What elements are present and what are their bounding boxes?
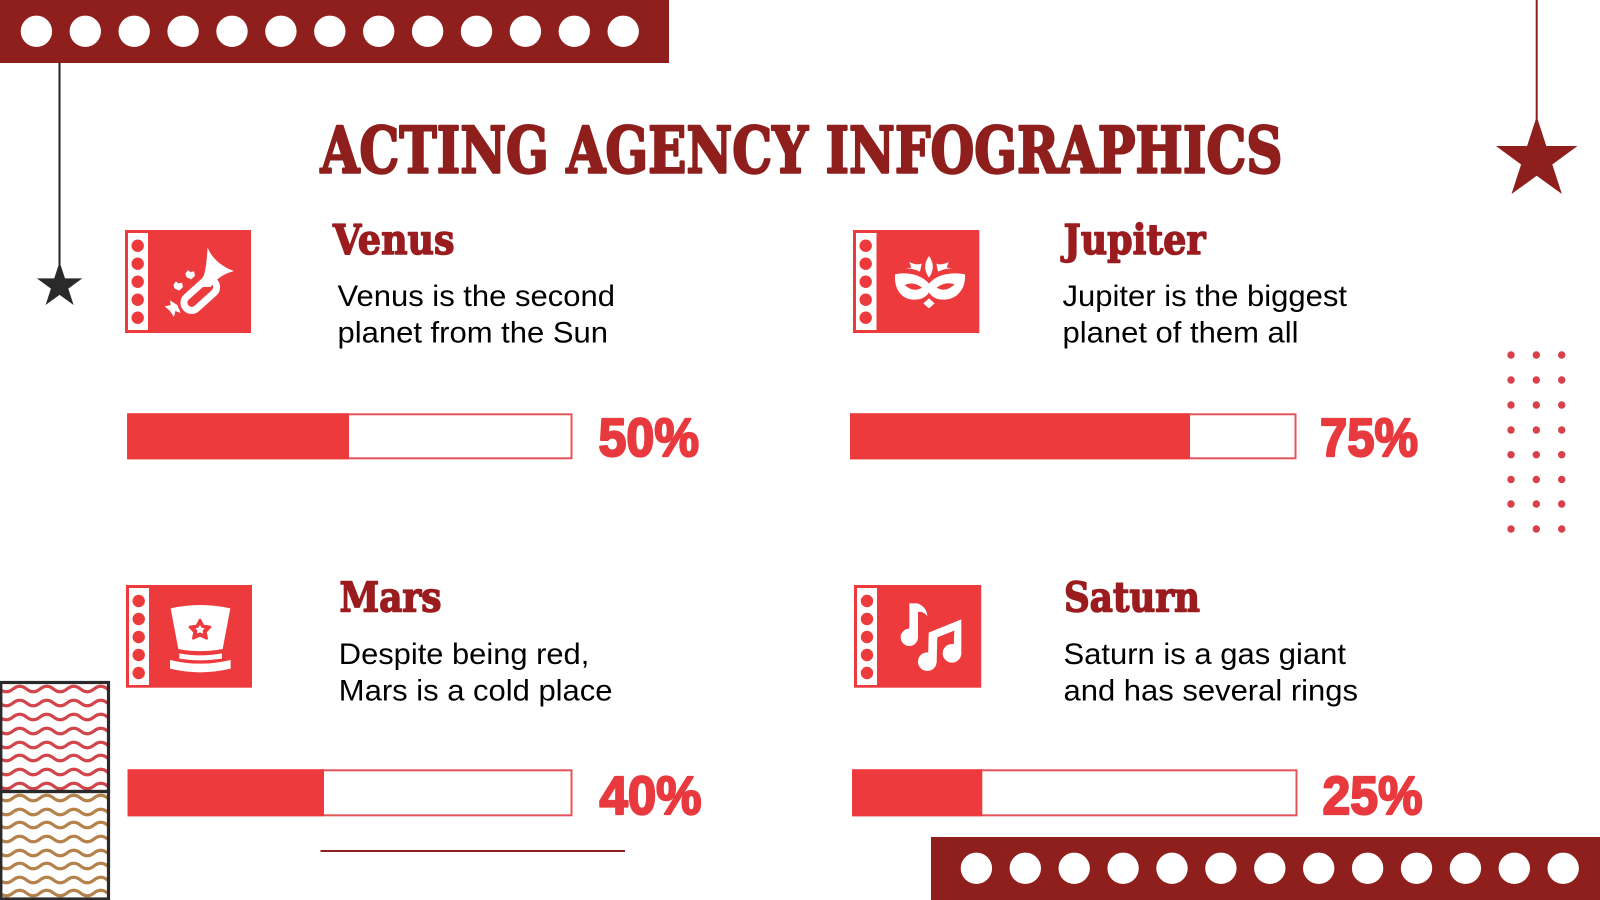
icon: theater mask ticket [853,230,979,333]
description: Venus: Venus is the second [338,280,615,313]
heading: Venus: Venus [332,216,454,264]
progress bar: 40% [128,769,571,816]
description: Saturn: Saturn is a gas giant [1064,638,1347,671]
percentage: 25%: 25% [1322,766,1422,826]
top perforated banner [0,0,669,63]
panel: Saturn [852,574,1422,826]
panel: Jupiter [850,216,1418,468]
heading: Saturn: Saturn [1064,574,1200,622]
description: Venus: planet from the Sun [338,317,608,350]
icon: music notes ticket [854,585,981,688]
description: Mars [339,638,612,708]
progress bar: 50% [128,413,572,459]
percentage: 50%: 50% [598,408,699,468]
icon: top hat ticket [126,585,252,688]
heading: Mars: Mars [340,574,442,622]
description: Jupiter: Jupiter is the biggest [1062,280,1348,313]
description: Venus [338,280,615,350]
description: Jupiter: planet of them all [1062,317,1298,350]
bottom rule [320,850,625,852]
icon: trumpet ticket [125,230,251,333]
panel: Venus [125,216,699,468]
bottom perforated banner [931,837,1600,900]
panel: Mars [126,574,702,826]
description: Mars: Mars is a cold place [339,675,612,708]
wavy pattern boxes [0,682,121,899]
description: Jupiter [1062,280,1348,350]
description: Saturn: and has several rings [1064,675,1358,708]
dot grid decoration [1507,351,1565,533]
percentage: 75%: 75% [1320,408,1418,468]
description: Mars: Despite being red, [339,638,589,671]
description: Saturn [1064,638,1358,708]
progress bar: 25% [852,769,1296,816]
hanging black star [37,63,82,305]
progress bar: 75% [850,413,1296,459]
hanging red star [1496,0,1578,194]
title: ACTING AGENCY INFOGRAPHICS [320,114,1282,188]
percentage: 40%: 40% [600,766,702,826]
heading: Jupiter: Jupiter [1061,216,1207,264]
